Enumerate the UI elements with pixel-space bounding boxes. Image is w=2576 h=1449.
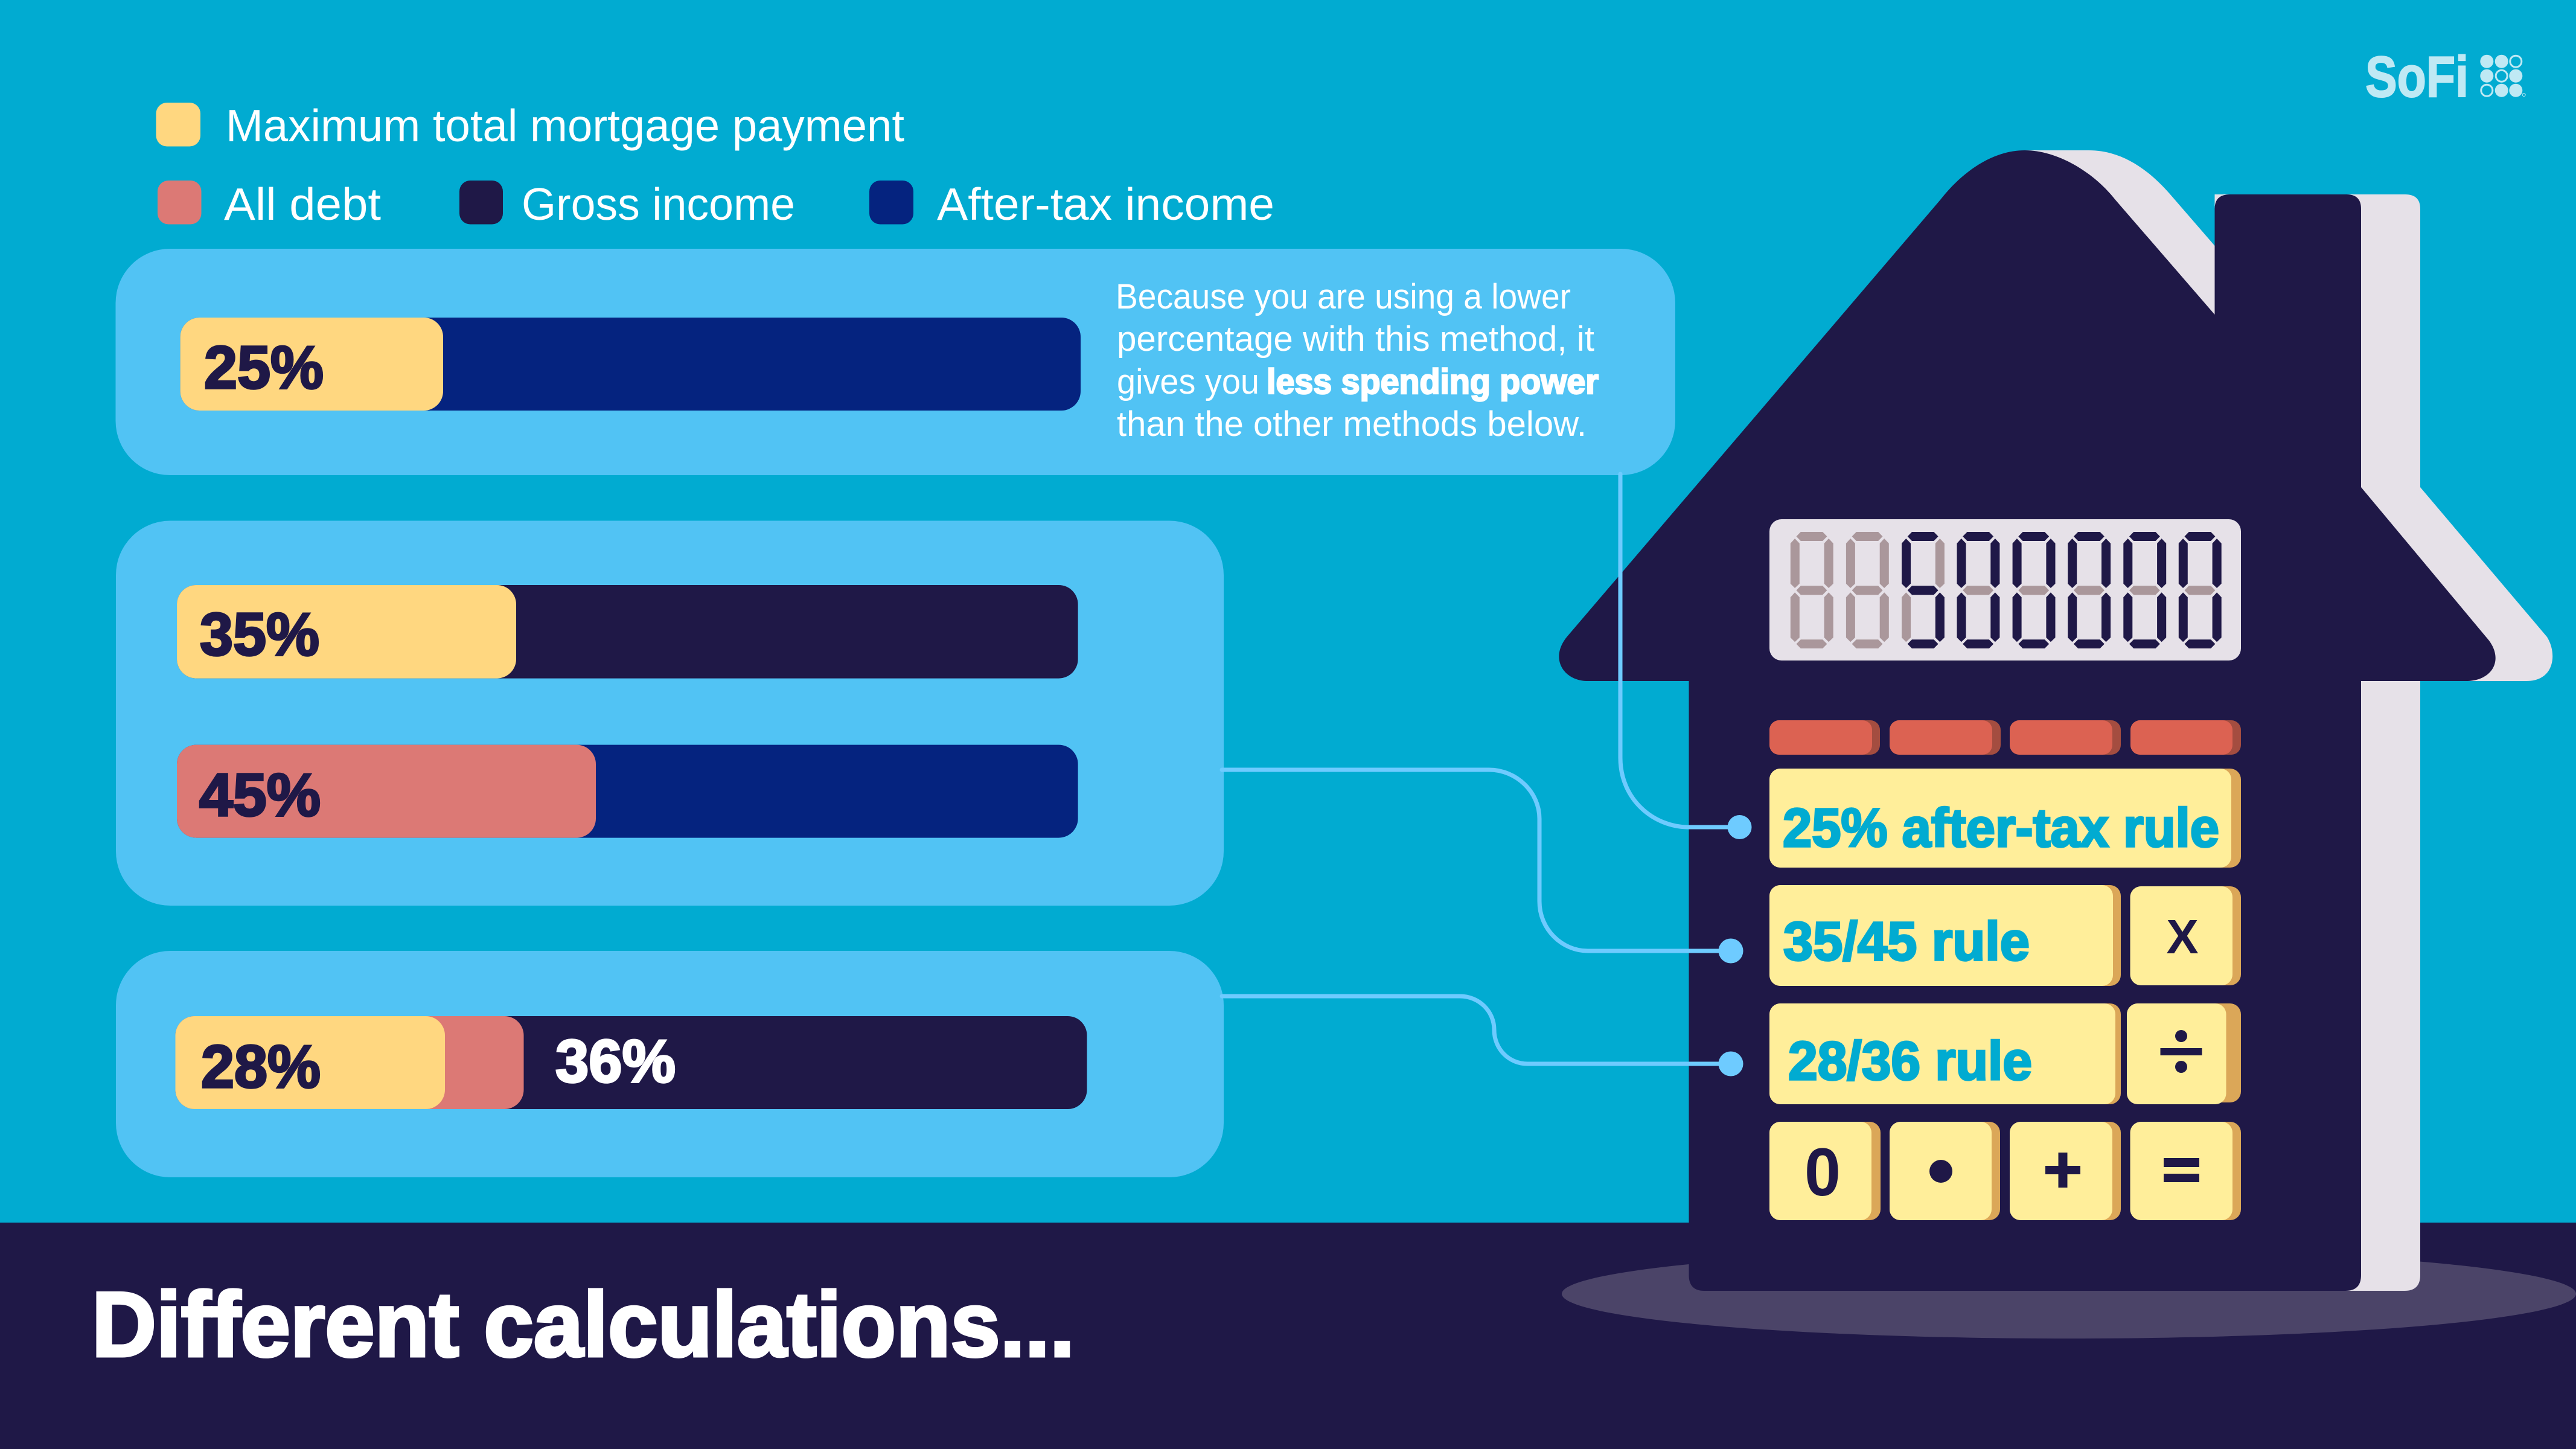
bar: 35% of gross income — [177, 585, 1078, 679]
bar: 45% of after-tax income — [177, 745, 1078, 838]
bar: 28% and 36% of gross income — [175, 1016, 1087, 1109]
house front — [1559, 150, 2496, 1291]
key: 28/36 rule — [1769, 1003, 2121, 1104]
SoFi logo: SoFi — [2365, 45, 2469, 109]
legend: after-tax income: After-tax income — [937, 179, 1274, 229]
key: 35/45 rule: 35/45 rule — [1783, 912, 2030, 972]
key: plus — [2010, 1122, 2121, 1220]
panel: 35/45 rule — [116, 520, 1224, 906]
panel: 28/36 rule — [116, 951, 1224, 1177]
legend — [156, 100, 1274, 229]
connector: 25% panel to key — [1620, 474, 1752, 839]
annotation text: than the other methods below. — [1117, 405, 1587, 444]
calculator display — [1769, 519, 2241, 661]
key: decimal point — [1890, 1122, 2000, 1220]
annotation text — [1116, 277, 1599, 444]
bar: 25% of after-tax income: 25% — [204, 334, 324, 401]
house illustration — [1559, 150, 2552, 1291]
annotation text: gives you — [1117, 362, 1259, 401]
connector: 35/45 panel to key — [1222, 770, 1743, 964]
legend: all debt: All debt — [224, 179, 381, 229]
key: divide — [2127, 1003, 2241, 1104]
red calculator buttons — [1769, 720, 2241, 755]
panel: 25% after-tax rule — [116, 249, 1675, 475]
key: multiply: X — [2166, 910, 2199, 964]
annotation text: percentage with this method, it — [1117, 319, 1594, 359]
bar: 25% of after-tax income — [181, 318, 1081, 411]
bar: 28% and 36% of gross income: 36% — [555, 1028, 676, 1095]
key: 28/36 rule: 28/36 rule — [1788, 1031, 2032, 1092]
house ground shadow — [1562, 1249, 2576, 1339]
key: 35/45 rule — [1769, 885, 2121, 986]
title: Different calculations... — [92, 1273, 1075, 1376]
key: zero — [1769, 1122, 1881, 1220]
key: 25% after-tax rule — [1769, 769, 2241, 868]
bar: 45% of after-tax income: 45% — [199, 761, 321, 829]
key: equals — [2130, 1122, 2241, 1220]
house side wall — [2025, 150, 2552, 1291]
legend: gross income: Gross income — [522, 179, 795, 229]
bar: 35% of gross income: 35% — [200, 601, 319, 668]
display digits — [1791, 532, 2222, 648]
bottom banner — [0, 1223, 2576, 1449]
annotation text: less spending power — [1267, 362, 1599, 401]
key: multiply — [2130, 886, 2241, 985]
logo dot grid — [2480, 55, 2525, 97]
legend: all debt — [158, 179, 381, 229]
legend: maximum total mortgage payment: Maximum total mortgage payment — [226, 100, 904, 151]
bar: 28% and 36% of gross income: 28% — [201, 1033, 321, 1101]
connector: 28/36 panel to key — [1222, 996, 1743, 1076]
annotation text: Because you are using a lower — [1116, 277, 1571, 316]
key: 25% after-tax rule: 25% after-tax rule — [1783, 798, 2219, 859]
key: zero: 0 — [1804, 1134, 1841, 1210]
